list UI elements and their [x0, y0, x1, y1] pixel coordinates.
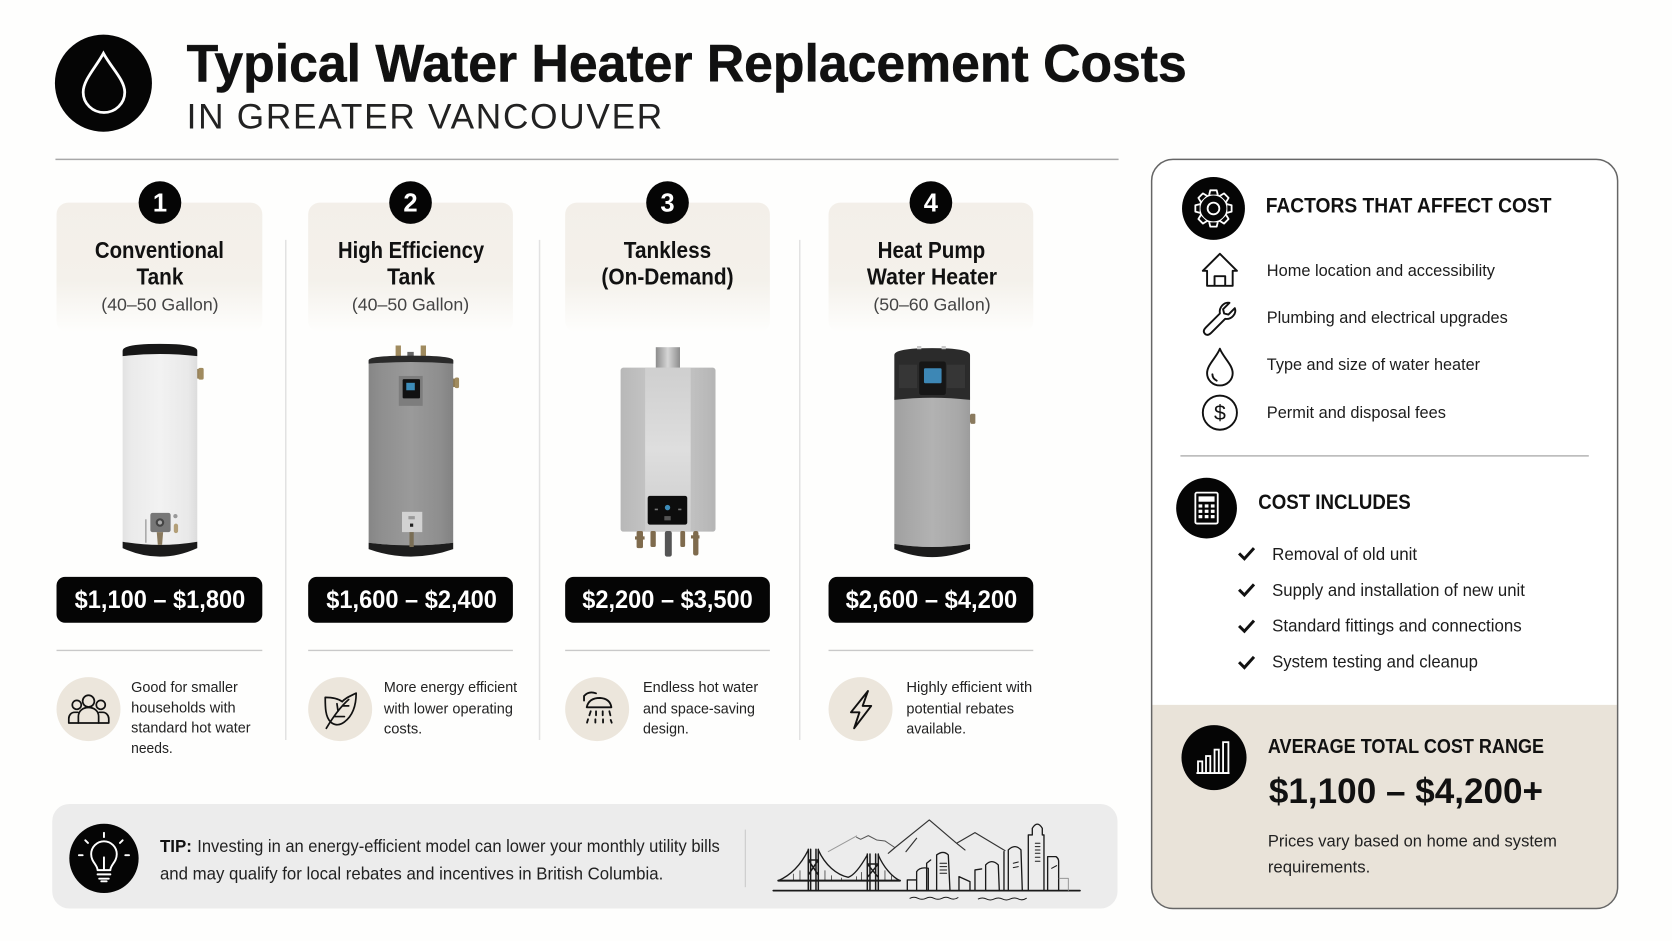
heading card: Water Heater	[867, 264, 997, 290]
water heater image	[369, 345, 459, 557]
text: plumbing: Plumbing and electrical upgrades	[1267, 308, 1508, 327]
heading card	[308, 203, 513, 333]
heading card	[565, 203, 770, 333]
number badge	[389, 181, 432, 224]
description	[383, 679, 518, 738]
number badge	[910, 181, 952, 224]
number badge: 2	[403, 190, 418, 218]
tip text: TIP:	[160, 836, 192, 856]
icon: shower	[565, 677, 629, 741]
price: $2,600 – $4,200	[846, 587, 1017, 614]
description: potential rebates	[906, 700, 1014, 717]
description: households with	[131, 699, 236, 716]
heading card: Conventional	[95, 237, 224, 263]
icon: bar chart	[1181, 725, 1247, 790]
description: available.	[906, 721, 966, 738]
description	[643, 679, 758, 738]
water heater image	[894, 346, 975, 557]
number badge	[139, 181, 181, 224]
title: Typical Water Heater Replacement Costs	[187, 35, 1187, 94]
description: with lower operating	[383, 700, 513, 717]
checklist: Supply and installation of new unit	[1272, 580, 1525, 600]
heading card: (On-Demand)	[601, 264, 734, 290]
panel: high efficiency tank	[308, 181, 518, 741]
note	[1268, 832, 1557, 876]
description: and space-saving	[643, 700, 755, 717]
icon: calculator	[1176, 478, 1237, 538]
water heater image	[621, 347, 716, 557]
tip text	[160, 836, 720, 884]
heading: FACTORS THAT AFFECT COST	[1266, 194, 1552, 218]
description: design.	[643, 721, 689, 738]
checklist	[1239, 544, 1525, 672]
description: needs.	[131, 740, 173, 757]
number badge: 3	[660, 190, 675, 218]
heading card: Heat Pump	[878, 237, 985, 263]
note: requirements.	[1268, 857, 1370, 876]
price: $1,100 – $1,800	[75, 587, 245, 614]
header	[55, 35, 1187, 136]
icon: water drop	[55, 35, 152, 132]
icon: dollar	[1203, 396, 1237, 430]
description: costs.	[384, 721, 422, 738]
heading card: High Efficiency	[338, 237, 484, 263]
heading: COST INCLUDES	[1258, 491, 1411, 514]
description: More energy efficient	[384, 679, 518, 696]
icon: gear	[1182, 177, 1245, 240]
heading card: Tank	[387, 264, 435, 290]
icon: leaf	[308, 677, 372, 741]
cost range: $1,100 – $4,200+	[1269, 772, 1543, 811]
panel: tankless	[565, 181, 770, 741]
heading card	[57, 203, 262, 333]
price: $2,200 – $3,500	[582, 587, 753, 614]
description: Highly efficient with	[906, 679, 1032, 696]
price: $1,600 – $2,400	[326, 587, 497, 614]
description: standard hot water	[131, 720, 251, 737]
number badge	[646, 181, 689, 224]
number badge: 1	[153, 190, 167, 218]
price	[829, 577, 1033, 623]
section: cost includes	[1176, 478, 1525, 672]
section: factors that affect cost	[1182, 177, 1552, 430]
illustration: Vancouver skyline	[773, 820, 1080, 900]
checklist: Standard fittings and connections	[1272, 615, 1522, 635]
number badge: 4	[924, 190, 939, 218]
tip text: and may qualify for local rebates and incentives in British Columbia.	[160, 864, 663, 884]
icon: lightning bolt	[829, 677, 893, 741]
icon: wrench	[1204, 303, 1235, 335]
heading card	[829, 203, 1033, 333]
icon: dollar: $	[1214, 401, 1226, 425]
checklist: System testing and cleanup	[1272, 652, 1478, 672]
price	[308, 577, 513, 623]
heading card: (40–50 Gallon)	[352, 294, 469, 314]
icon: people	[57, 677, 120, 741]
description: Endless hot water	[643, 679, 758, 696]
heading card: Tankless	[624, 237, 711, 263]
icon: light bulb	[69, 824, 139, 893]
section: average total cost range	[1181, 725, 1557, 876]
description	[906, 679, 1032, 738]
checklist: Removal of old unit	[1272, 544, 1417, 564]
callout: tip	[52, 804, 1118, 909]
heading card: (50–60 Gallon)	[873, 294, 991, 314]
description: Good for smaller	[131, 679, 238, 696]
heading card: (40–50 Gallon)	[101, 294, 219, 314]
subtitle: IN GREATER VANCOUVER	[187, 97, 662, 136]
note: Prices vary based on home and system	[1268, 832, 1557, 851]
heading card: Tank	[136, 264, 184, 290]
text: location: Home location and accessibility	[1267, 261, 1496, 280]
icon: drop	[1207, 349, 1233, 385]
price	[57, 577, 262, 623]
text: permit: Permit and disposal fees	[1267, 403, 1446, 422]
text: type and size: Type and size of water heater	[1267, 355, 1481, 374]
heading: AVERAGE TOTAL COST RANGE	[1268, 736, 1544, 758]
icon: house	[1203, 254, 1237, 286]
tip text: Investing in an energy-efficient model can lower your monthly utility bills	[197, 836, 720, 856]
water heater image	[123, 344, 204, 557]
price	[565, 577, 770, 623]
description	[131, 679, 251, 757]
panel: conventional tank	[57, 181, 262, 757]
panel: sidebar	[1152, 159, 1618, 909]
panel: heat pump	[829, 181, 1033, 741]
